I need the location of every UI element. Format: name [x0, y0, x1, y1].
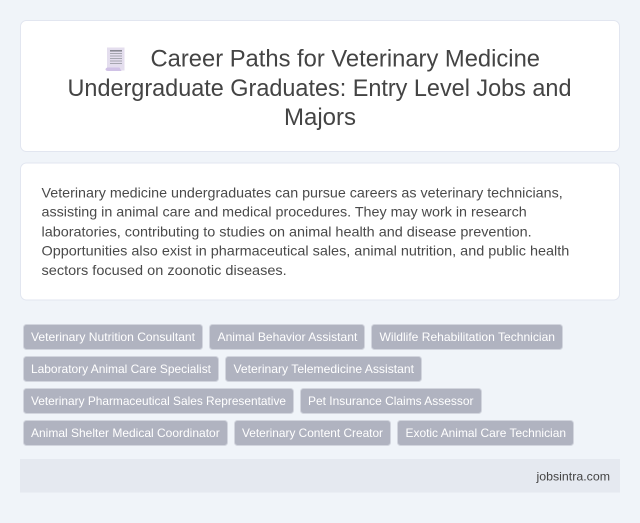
footer	[20, 459, 620, 492]
tag: Animal Behavior Assistant: Animal Behavior Assistant	[218, 330, 358, 344]
tag: Wildlife Rehabilitation Technician	[372, 324, 562, 350]
tag: Veterinary Pharmaceutical Sales Representative	[24, 388, 294, 414]
tag: Exotic Animal Care Technician: Exotic Animal Care Technician	[406, 426, 566, 440]
tag: Laboratory Animal Care Specialist: Laboratory Animal Care Specialist	[31, 362, 212, 376]
tag: Laboratory Animal Care Specialist	[24, 356, 218, 382]
panel: description	[20, 163, 620, 300]
tag: Veterinary Nutrition Consultant: Veterinary Nutrition Consultant	[31, 330, 196, 344]
tag: Veterinary Nutrition Consultant	[24, 324, 202, 350]
title: Undergraduate Graduates: Entry Level Jobs and	[68, 75, 572, 102]
tag: Veterinary Telemedicine Assistant	[226, 356, 422, 382]
text block: description	[42, 184, 569, 278]
tag: Animal Shelter Medical Coordinator: Animal Shelter Medical Coordinator	[31, 426, 220, 440]
panel: title header	[20, 20, 620, 152]
tag: Animal Shelter Medical Coordinator	[24, 420, 228, 446]
tag: Veterinary Content Creator: Veterinary Content Creator	[242, 426, 383, 440]
title	[68, 46, 572, 131]
text block: description: sectors focused on zoonotic diseases.	[42, 262, 287, 278]
text block: description: laboratories, contributing to studies on animal health and disease prevention.	[42, 224, 532, 240]
tag: Exotic Animal Care Technician	[398, 420, 574, 446]
tag list	[24, 324, 574, 446]
footer source text: jobsintra.com	[535, 470, 610, 484]
title: Career Paths for Veterinary Medicine	[150, 46, 540, 73]
text block: description: Opportunities also exist in pharmaceutical sales, animal nutrition, and public health	[42, 242, 569, 258]
icon: scroll document	[106, 48, 124, 71]
tag: Pet Insurance Claims Assessor: Pet Insurance Claims Assessor	[308, 394, 474, 408]
tag: Veterinary Telemedicine Assistant: Veterinary Telemedicine Assistant	[234, 362, 415, 376]
title: Majors	[284, 104, 356, 131]
text block: description: Veterinary medicine undergraduates can pursue careers as veterinary technicians,	[42, 184, 563, 200]
tag: Veterinary Pharmaceutical Sales Representative: Veterinary Pharmaceutical Sales Representative	[31, 394, 286, 408]
tag: Animal Behavior Assistant	[210, 324, 364, 350]
tag: Pet Insurance Claims Assessor	[300, 388, 482, 414]
tag: Wildlife Rehabilitation Technician: Wildlife Rehabilitation Technician	[380, 330, 555, 344]
text block: description: assisting in animal care and medical procedures. They may work in research	[42, 204, 527, 220]
tag: Veterinary Content Creator	[234, 420, 390, 446]
